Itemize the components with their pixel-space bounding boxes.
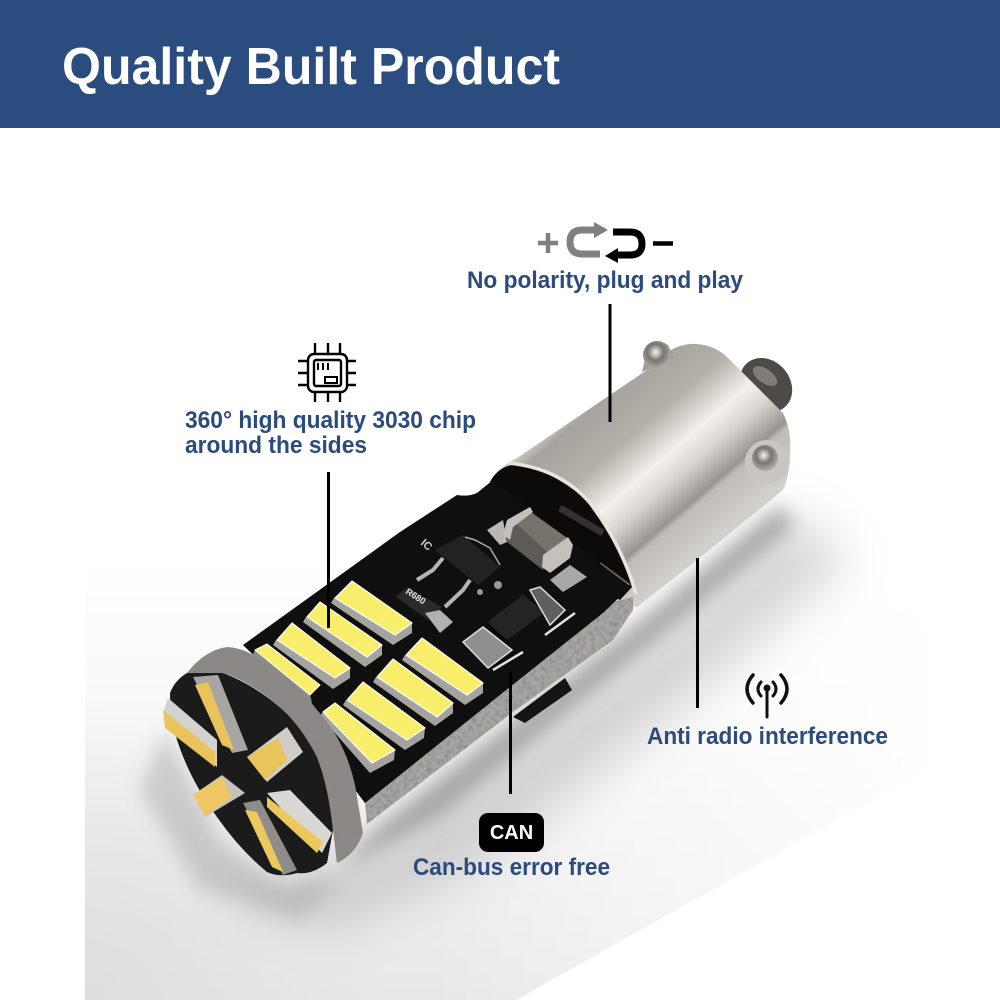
clip behind board [513,678,572,723]
circuit board [243,480,630,803]
end chip A [193,675,248,753]
callout: radio [647,558,888,750]
header band [0,0,1000,128]
LED 3 [303,602,382,667]
surface components [396,507,587,670]
LED 7 [373,659,453,726]
leader line [327,472,330,628]
polarity label: No polarity, plug and play [467,267,744,294]
cylinder opening [490,463,636,600]
leader line [608,304,612,422]
LED 5 [320,703,395,773]
end chip F [243,800,297,875]
metal cylinder base [490,344,790,607]
CAN badge [479,813,544,852]
leader line [509,672,512,794]
capacitor [487,507,587,592]
transistor chip 1 [435,535,500,585]
callout: polarity [467,222,744,422]
contact pin right [745,440,789,484]
callout: can-bus [413,672,610,881]
LED 2 [273,623,350,689]
resistor R680 [396,586,453,633]
metal base tip [729,347,803,423]
CAN badge: CAN [490,822,533,844]
end cap disc [170,673,333,875]
end chip B [163,698,217,767]
icon: antenna [747,675,787,717]
leader line [696,558,699,708]
surface components: IC [418,537,434,553]
end chip C [247,727,303,782]
LED 6 [343,682,425,750]
LED 4 [331,581,412,645]
side edge of circuit board [365,597,633,824]
LED 8 [402,638,483,705]
contact pin top [642,341,674,372]
chip label [185,407,476,459]
LED 1 [252,644,320,703]
end cap LED chips [163,675,332,875]
can-bus label: Can-bus error free [413,854,610,881]
bulb shadow [140,505,850,930]
resistor R680: R680 [404,586,427,606]
LED bulb product [163,341,803,875]
grey end cap ring [187,647,363,863]
chip label: 360° high quality 3030 chip [185,407,476,434]
photo backdrop [85,713,724,1000]
chip label: around the sides [185,432,367,459]
top LED chips [252,581,483,773]
end chip D [193,775,245,817]
radio label: Anti radio interference [647,723,888,750]
end chip E [267,790,332,853]
title: Quality Built Product [62,38,560,96]
icon: polarity arrows [538,222,673,263]
callout: chip [185,343,476,628]
transistor chip 2 [487,595,545,640]
icon: chip [298,343,356,402]
